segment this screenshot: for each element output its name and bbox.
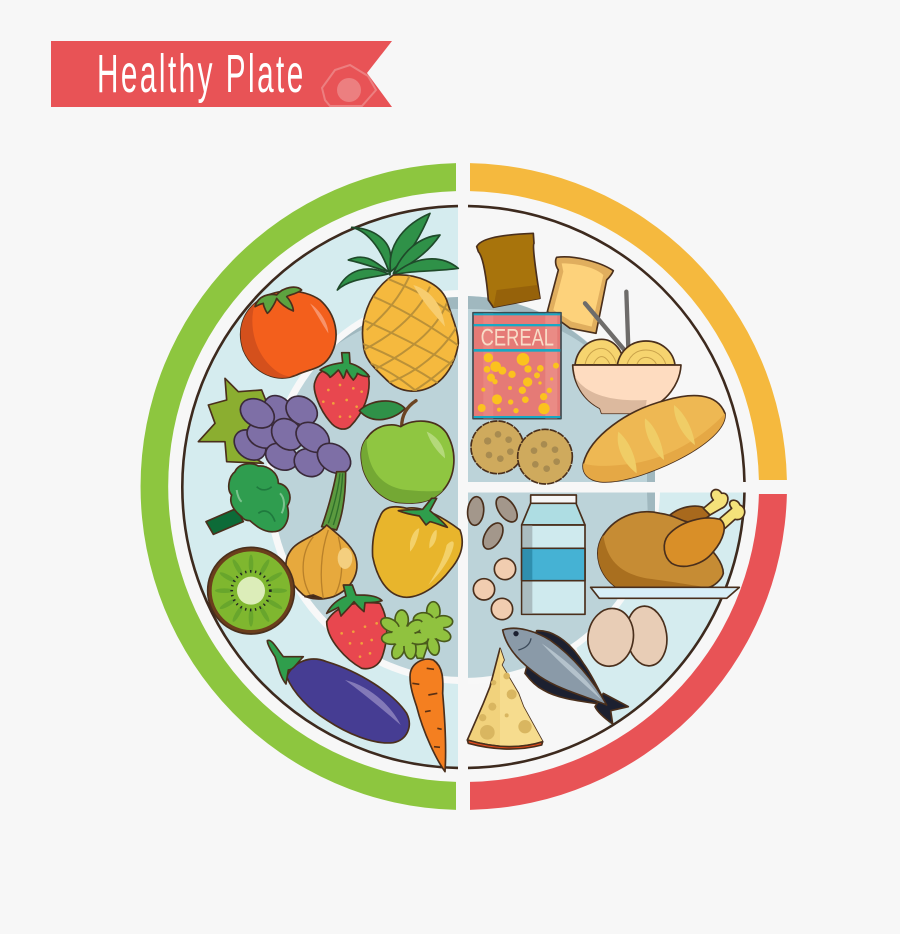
bowl xyxy=(573,365,681,413)
onion xyxy=(286,472,357,599)
grapes xyxy=(228,390,356,482)
long beans xyxy=(466,493,521,552)
strawberry (lower) xyxy=(327,585,387,669)
milk carton xyxy=(522,495,585,614)
cheese wedge xyxy=(467,648,543,749)
round beans xyxy=(473,558,516,620)
roast chicken xyxy=(598,490,745,587)
toast xyxy=(547,257,613,333)
carrot xyxy=(410,659,446,772)
brown bread xyxy=(477,233,540,307)
outer ring: grains (yellow) xyxy=(470,163,787,480)
noodles xyxy=(575,339,675,365)
fish xyxy=(503,628,628,724)
plate rim outline xyxy=(182,206,744,768)
cereal box: CEREAL xyxy=(481,325,554,352)
pineapple xyxy=(337,213,460,397)
quadrant: grains (upper right) xyxy=(471,233,725,484)
plate background xyxy=(182,206,744,768)
grape leaf xyxy=(198,378,268,463)
chopsticks xyxy=(585,292,628,351)
quadrant: vegetables (lower left) xyxy=(206,464,462,772)
outer ring: vegetables and fruit (green) xyxy=(141,163,456,810)
kiwi xyxy=(208,547,294,634)
outer ring: protein (red) xyxy=(470,494,787,810)
bread loaf xyxy=(583,396,725,482)
carrot greens xyxy=(378,602,453,661)
apple leaf and stem xyxy=(359,401,416,427)
cereal box xyxy=(473,313,561,419)
cookies xyxy=(471,421,572,484)
title banner xyxy=(51,41,392,107)
quadrant: fruit (upper left) xyxy=(198,213,460,503)
broccoli xyxy=(206,464,290,534)
eggplant xyxy=(267,640,409,743)
title banner: Healthy Plate xyxy=(97,45,306,104)
eggs xyxy=(584,604,671,669)
apple xyxy=(361,421,454,503)
serving plate xyxy=(591,587,739,598)
strawberry (upper) xyxy=(314,353,369,429)
tomato xyxy=(241,287,336,378)
quadrant: protein (lower right) xyxy=(466,490,745,749)
yellow pepper xyxy=(372,498,462,597)
